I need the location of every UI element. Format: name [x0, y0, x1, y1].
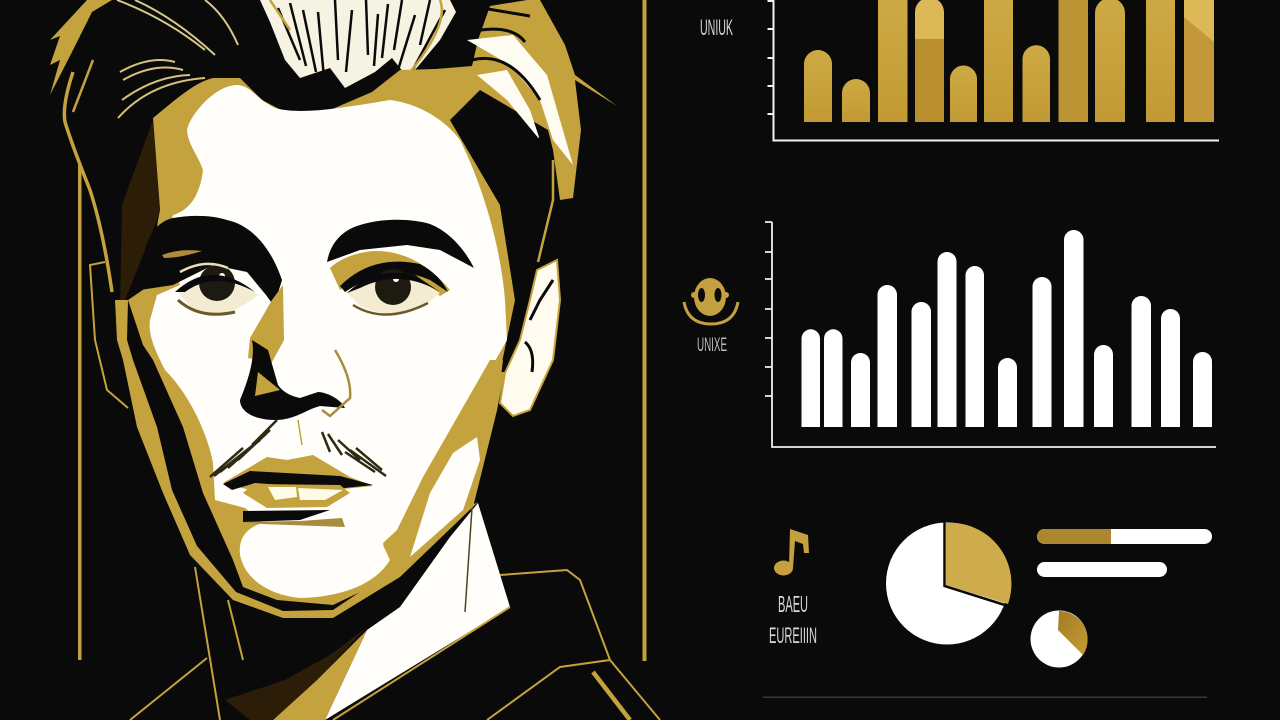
hair: white right strands — [465, 8, 573, 165]
temple brown shadow — [120, 120, 160, 310]
divider — [763, 696, 1207, 698]
left nose-bridge gold — [248, 285, 284, 362]
caption under note: BAEU — [778, 591, 808, 617]
icon: music note — [774, 529, 809, 576]
axes — [768, 0, 1219, 140]
right eyebrow — [327, 220, 474, 268]
white bars — [802, 230, 1212, 427]
hair: gold right sweep — [400, 0, 617, 200]
top gold bar chart: UNIUK — [700, 15, 733, 40]
white bar chart — [684, 222, 1216, 447]
large pie chart — [886, 522, 1011, 644]
gold bars — [804, 0, 1214, 122]
hair: white top with black streaks — [260, 0, 456, 88]
jaw contour: gold outer strip — [115, 300, 478, 618]
gold vertical frame lines — [78, 0, 646, 661]
hair: gold left tips and contour — [50, 0, 238, 292]
axes — [765, 222, 1216, 447]
hair edge line — [538, 160, 553, 262]
moustache — [210, 420, 386, 477]
label: UNIXE — [697, 335, 727, 356]
right ear — [500, 260, 560, 416]
neck — [225, 503, 510, 720]
top gold bar chart — [700, 0, 1219, 140]
left ear outline — [90, 262, 128, 408]
caption under note: EUREIIIN — [769, 623, 817, 648]
neck and collar lines — [130, 567, 660, 720]
icon: smiley face — [684, 278, 738, 324]
nose — [240, 340, 350, 445]
portrait illustration — [50, 0, 660, 720]
face: gold shadow base — [128, 68, 515, 605]
progress bars — [1037, 529, 1212, 577]
left eyebrow — [140, 216, 282, 306]
jaw: gold wedge with white highlight — [380, 360, 503, 583]
face: white skin — [150, 85, 507, 598]
small pie chart — [1030, 610, 1088, 668]
mouth — [223, 455, 373, 527]
left eye — [175, 264, 262, 315]
right eye — [340, 262, 448, 315]
face: black sideburn — [450, 120, 553, 372]
right eye crease — [330, 251, 450, 296]
caption under note — [769, 591, 817, 648]
